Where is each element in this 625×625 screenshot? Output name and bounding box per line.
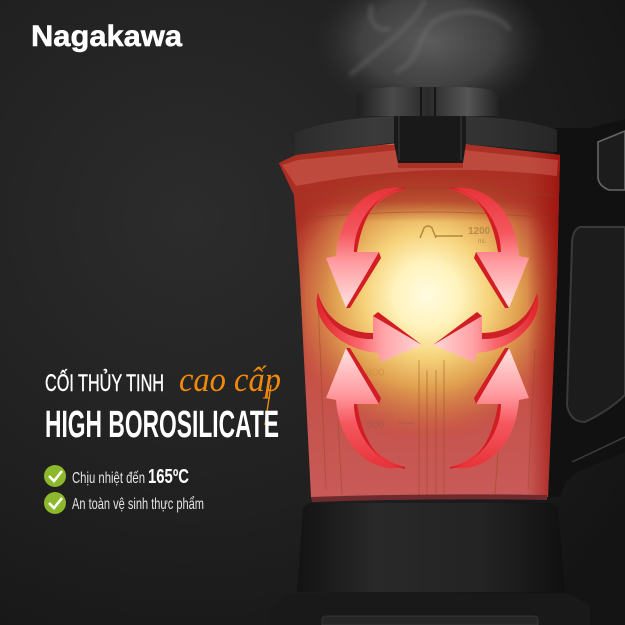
handle grip line bbox=[572, 437, 625, 462]
volume markings: 800 bbox=[366, 419, 384, 431]
steam bbox=[315, 0, 545, 117]
arrow: top right bbox=[450, 187, 529, 308]
top knob bbox=[357, 87, 499, 116]
heat glow bbox=[297, 182, 558, 426]
arrow: middle left bbox=[317, 293, 422, 362]
bullet 1 bbox=[44, 465, 189, 488]
volume markings: 800 bbox=[366, 367, 384, 379]
bottom rim bbox=[311, 494, 547, 502]
handle upper window bbox=[598, 131, 625, 190]
base foot bbox=[270, 594, 590, 625]
arrow: bottom right bbox=[450, 348, 529, 469]
blender handle bbox=[548, 119, 625, 497]
heading line 2: HIGH BOROSILICATE bbox=[45, 404, 279, 446]
highlight band under lid bbox=[282, 150, 558, 186]
arrow: top left bbox=[326, 187, 405, 308]
arrow: middle right bbox=[433, 293, 538, 362]
base panel bbox=[322, 616, 538, 625]
lid center tab bbox=[394, 116, 466, 163]
bullet 2 bbox=[44, 492, 204, 514]
heat arrows bbox=[317, 187, 538, 469]
jar edge shading bbox=[279, 140, 561, 500]
icon: check bbox=[44, 492, 66, 514]
handle lower window bbox=[567, 227, 625, 422]
ribs and markings bbox=[296, 188, 556, 495]
logo: Nagakawa bbox=[31, 20, 182, 53]
glass jar bbox=[277, 140, 577, 502]
script heading: cao cấp bbox=[179, 360, 281, 399]
bullet 1: Chịu nhiệt đến bbox=[72, 470, 145, 487]
volume markings bbox=[366, 226, 491, 431]
arrow: bottom left bbox=[326, 348, 405, 469]
upper red shade bbox=[277, 145, 577, 222]
bullet 1: 165ºC bbox=[148, 466, 189, 488]
script heading bbox=[179, 360, 281, 425]
bullet 2: An toàn vệ sinh thực phẩm bbox=[72, 495, 204, 513]
heading line 1: CỐI THỦY TINH bbox=[45, 368, 164, 397]
icon: check bbox=[44, 465, 66, 487]
volume markings: 1200 bbox=[468, 226, 491, 237]
volume markings: mL bbox=[478, 239, 487, 245]
collar lid bbox=[295, 116, 557, 163]
lower base bbox=[270, 503, 590, 625]
